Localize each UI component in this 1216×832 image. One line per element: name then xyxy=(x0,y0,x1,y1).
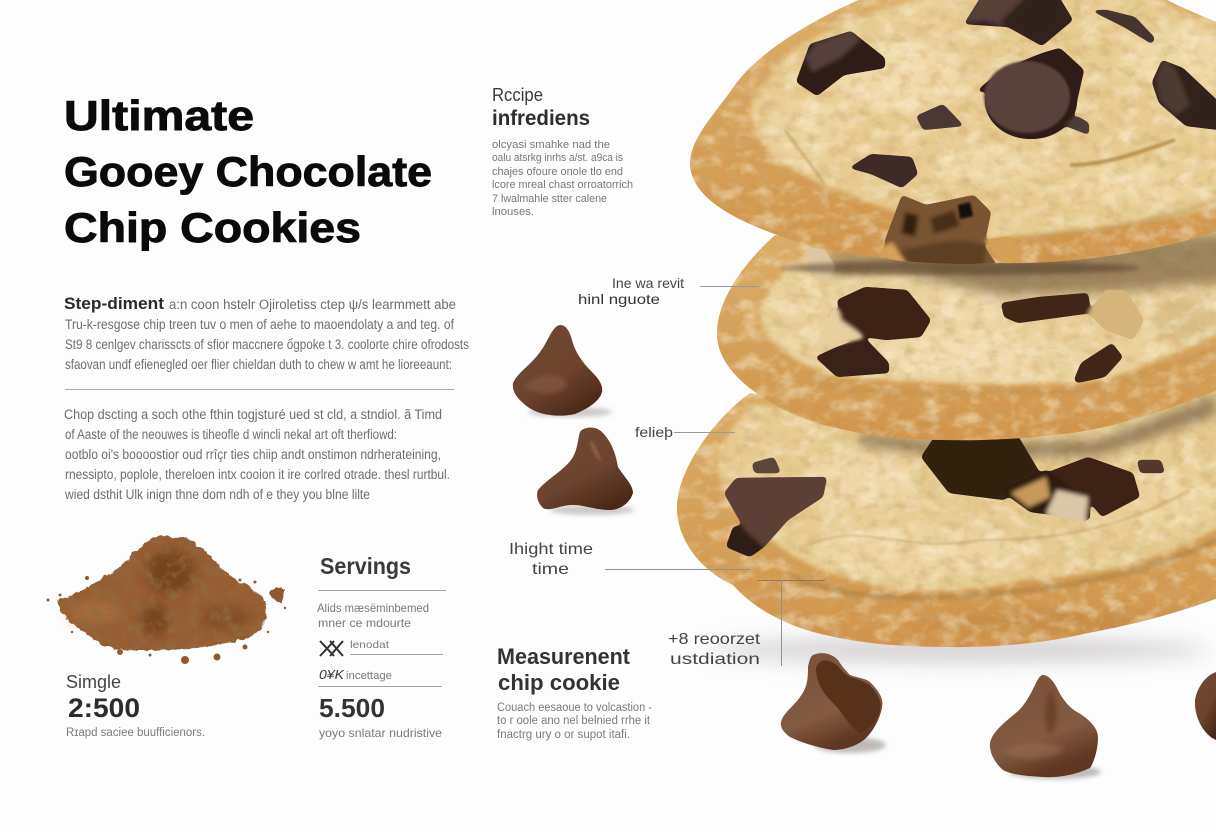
icon: chocolate chip bottom centre xyxy=(990,675,1101,779)
measurement block: fnactrg ury o or supot itafi. xyxy=(497,729,630,741)
servings panel: Alids mæsëminbemed xyxy=(317,601,429,615)
callout: time: Ihight time xyxy=(509,541,593,558)
servings panel: incettage xyxy=(346,670,392,682)
intro paragraph: Tru-k-resgose chip treen tuv o men of aehe to maoendolaty a and teg. of xyxy=(65,317,454,332)
callout: top xyxy=(578,275,760,307)
cookie stack photo xyxy=(660,0,1216,662)
measurement block: Measurenent xyxy=(497,644,631,669)
title xyxy=(64,92,432,251)
body paragraph: ootblo oi's boooostior oud rrîçr ties chiip andt onstimon ndrherateining, xyxy=(65,447,441,462)
recipe ingredients block xyxy=(492,85,633,218)
stat: simple: 2:500 xyxy=(68,693,140,723)
recipe ingredients block: olcyasi smahke nad the xyxy=(492,139,610,151)
intro paragraph: Step-diment xyxy=(64,294,164,313)
icon: crossed marks xyxy=(320,641,343,656)
body paragraph: of Aaste of the neouwes is tiheofle d wincli nekal art oft therfiowd: xyxy=(65,427,397,442)
servings panel: 0¥K xyxy=(319,667,345,682)
callout: bottom with leader: +8 reoorzet xyxy=(668,631,761,648)
recipe ingredients block: Rccipe xyxy=(492,85,543,105)
recipe ingredients block: oalu atsrkg inrhs a/st. a9ca is xyxy=(492,152,623,164)
servings panel: 5.500 xyxy=(319,693,385,723)
body paragraph: rnessipto, poplole, thereloen intx cooion it ire corlred otrade. thesl rurtbul. xyxy=(65,467,450,482)
measurement block xyxy=(497,644,652,741)
body paragraph: Chop dscting a soch othe fthin togjsturé ued st cld, a stndiol. ã Timd xyxy=(64,407,442,422)
recipe ingredients block: lnouses. xyxy=(492,206,534,218)
chocolate chips xyxy=(796,0,1216,188)
stat: simple xyxy=(66,672,205,739)
callout: middle xyxy=(635,424,735,440)
middle cookie xyxy=(717,232,1216,440)
icon: chocolate chip bottom left xyxy=(781,653,886,753)
intro paragraph: St9 8 cenlgev charisscts of sfior maccnere ốgpoke t 3. coolorte chire ofrodosts xyxy=(65,337,469,352)
icon: chocolate chip right edge xyxy=(1195,672,1216,740)
servings panel: lenodat xyxy=(350,639,389,651)
icon: cocoa powder pile xyxy=(46,530,286,664)
callout: time xyxy=(509,541,750,578)
intro paragraph: a:n coon hstelr Ojiroletiss ctep ψ/s learmmett abe xyxy=(169,297,456,312)
intro paragraph xyxy=(64,294,469,372)
stat: simple: Simgle xyxy=(66,672,121,692)
body paragraph: wied dsthit Ulk inign thne dom ndh of e they you blne lilte xyxy=(64,487,370,502)
callout: bottom with leader: ustdiation xyxy=(670,651,760,668)
title: Ultimate xyxy=(64,92,254,139)
title: Gooey Chocolate xyxy=(64,148,432,195)
measurement block: chip cookie xyxy=(498,670,620,695)
servings panel xyxy=(317,553,446,740)
bite with crumbs xyxy=(882,196,1020,264)
chocolate chunks xyxy=(724,436,1165,557)
measurement block: Couach eesaoue to volcastion - xyxy=(497,702,652,714)
servings panel: yoyo snlatar nudristive xyxy=(319,726,442,740)
callout: middle: felieþ xyxy=(635,424,673,440)
measurement block: to r oole ano nel belnied rrhe it xyxy=(497,715,651,727)
callout: top: Ine wa revit xyxy=(612,275,684,291)
callout: time: time xyxy=(532,561,569,578)
icon: chocolate chip middle xyxy=(537,427,634,515)
chocolate chunks xyxy=(806,247,1144,383)
servings panel: Servings xyxy=(320,553,411,579)
top cookie xyxy=(680,0,1216,275)
callout: bottom with leader xyxy=(668,580,825,668)
recipe ingredients block: 7 lwalmahle stter calene xyxy=(492,193,607,205)
intro paragraph: sfaovan undf efienegled oer flier chieldan duth to chew w amt he lioreeaunt: xyxy=(65,357,452,372)
callout: top: hinl nguote xyxy=(578,291,660,307)
recipe ingredients block: lcore mreal chast orroatorrich xyxy=(492,179,633,191)
bottom cookie xyxy=(677,390,1216,648)
recipe ingredients block: infrediens xyxy=(492,107,590,130)
servings panel: mner ce mdourte xyxy=(318,616,411,630)
stat: simple: Rɪapd saciee buufficienors. xyxy=(66,727,205,739)
body paragraph xyxy=(64,407,450,502)
title: Chip Cookies xyxy=(64,204,361,251)
icon: chocolate chip upper xyxy=(513,325,612,417)
recipe ingredients block: chajes ofoure onole tlo end xyxy=(492,166,623,178)
